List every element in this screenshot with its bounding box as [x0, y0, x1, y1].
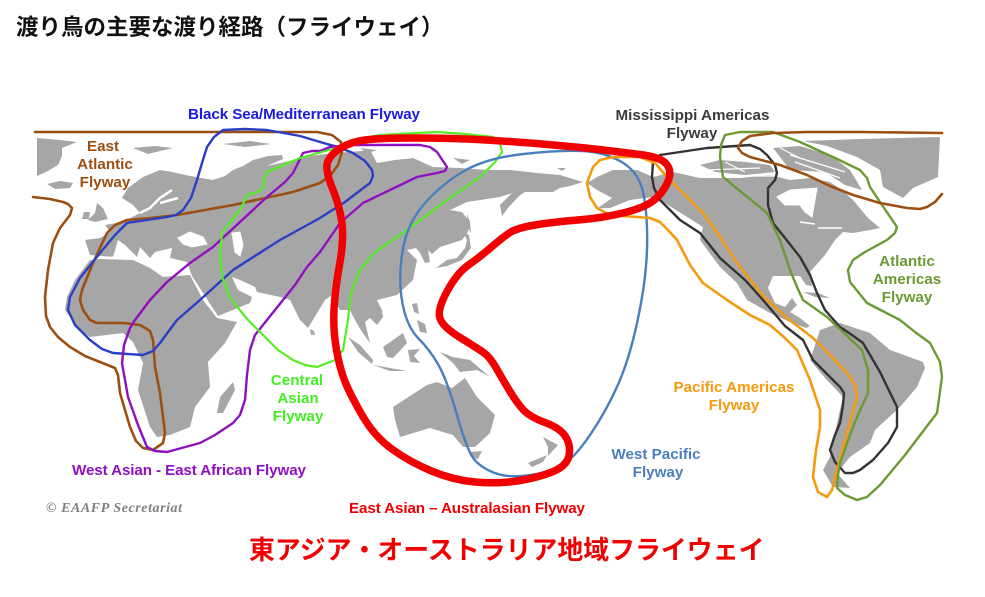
land: Tasmania — [470, 451, 482, 459]
label: West Asian East African Flyway: West Asian - East African Flyway — [72, 462, 307, 479]
label: East Atlantic Flyway: Atlantic — [77, 156, 133, 173]
route: Central Asian Flyway — [220, 132, 502, 367]
route: Pacific Americas Flyway — [587, 157, 857, 497]
water: Baltic Sea — [140, 190, 178, 213]
route: Atlantic Americas Flyway — [720, 132, 942, 500]
land: Madagascar — [217, 382, 235, 413]
label: Black Sea Mediterranean Flyway: Black Sea/Mediterranean Flyway — [188, 106, 421, 123]
land: Indonesia and New Guinea — [348, 333, 490, 377]
label: Central Asian Flyway: Asian — [277, 390, 319, 407]
label: Atlantic Americas Flyway: Flyway — [882, 289, 933, 306]
land: Arctic Canada — [700, 146, 862, 190]
route: East Atlantic Flyway — [33, 132, 342, 450]
land: Philippines and Taiwan — [412, 303, 427, 333]
route: Black Sea Mediterranean Flyway — [68, 129, 373, 355]
label: East Asian Australasian Flyway: East Asian – Australasian Flyway — [349, 500, 586, 517]
route: East Asian Australasian Flyway — [327, 138, 670, 483]
label: Pacific Americas Flyway: Flyway — [709, 397, 760, 414]
label: West Pacific Flyway: West Pacific — [611, 446, 701, 463]
land: North America — [587, 170, 880, 328]
land: Africa — [65, 259, 237, 437]
land: Greenland east — [37, 138, 77, 176]
label: West Pacific Flyway: Flyway — [633, 464, 684, 481]
route: West Asian East African Flyway — [122, 145, 447, 452]
land: Iceland — [47, 181, 73, 189]
water: Arctic channels — [705, 148, 845, 178]
water: Caspian Sea — [232, 232, 243, 256]
land: Greenland west — [803, 137, 940, 198]
copyright credit: © EAAFP Secretariat — [46, 501, 183, 516]
label: Atlantic Americas Flyway: Americas — [873, 271, 941, 288]
water: seas and lakes — [100, 148, 845, 275]
land: Japan — [436, 233, 471, 268]
label: Central Asian Flyway: Central — [271, 372, 323, 389]
label: Pacific Americas Flyway: Pacific Americas — [673, 379, 795, 396]
land: arctic islands — [133, 141, 566, 171]
red caption: 東アジア・オーストラリア地域フライウェイ — [249, 536, 764, 565]
land: New Zealand — [528, 437, 558, 467]
label: Mississippi Americas Flyway: Mississippi Americas — [616, 107, 769, 124]
land: Eurasia — [85, 150, 583, 343]
world map land — [37, 137, 940, 488]
water: Mediterranean — [100, 250, 187, 275]
title: 渡り鳥の主要な渡り経路（フライウェイ） — [16, 15, 444, 40]
water: great lakes — [800, 222, 842, 228]
land: South America — [810, 323, 925, 488]
label: East Atlantic Flyway: Flyway — [80, 174, 131, 191]
route: Mississippi Americas Flyway — [652, 145, 897, 473]
label: Central Asian Flyway: Flyway — [273, 408, 324, 425]
land: Sri Lanka — [310, 329, 315, 335]
land: Sakhalin — [467, 214, 471, 233]
label: Atlantic Americas Flyway: Atlantic — [879, 253, 935, 270]
water: Black Sea — [178, 232, 207, 247]
label: Mississippi Americas Flyway: Flyway — [667, 125, 718, 142]
water: Hudson Bay — [777, 188, 817, 217]
route: West Pacific Flyway — [400, 151, 647, 476]
land: British Isles — [82, 203, 108, 222]
land: Australia — [393, 378, 495, 447]
label: East Atlantic Flyway: East — [87, 138, 119, 155]
route: East Atlantic Flyway over the Americas — [738, 132, 942, 209]
land: Caribbean — [803, 292, 830, 298]
